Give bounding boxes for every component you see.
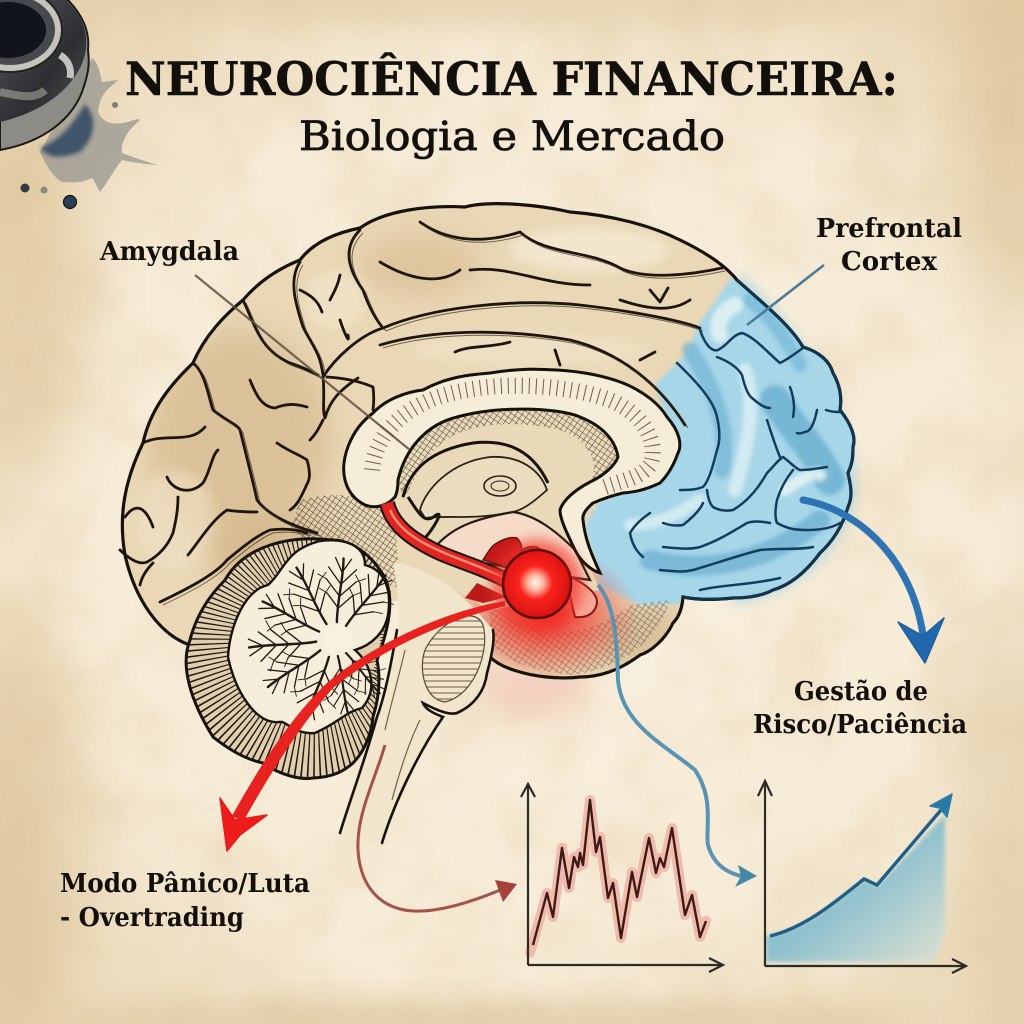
crosshatched rim of inner area: [398, 409, 618, 500]
ink splatter: [40, 58, 157, 192]
corpus callosum: [344, 369, 680, 573]
label: Amygdala: Amygdala: [99, 237, 239, 267]
cerebrum outline: [122, 204, 854, 678]
crosshatch between cortex and cerebellum: [290, 495, 400, 590]
s-curl: [408, 497, 439, 538]
arrow: thin blue to growth chart: [598, 585, 757, 887]
title line 2: Biologia e Mercado: [299, 114, 725, 160]
brainstem: [340, 563, 494, 843]
arrow: red panic arrow: [220, 601, 505, 851]
chart: steady growth: [758, 781, 966, 973]
lower frontal crosshatch: [490, 600, 670, 675]
blue watercolor patches: [630, 300, 830, 566]
pale band beneath thalamus: [437, 512, 590, 580]
amygdala: [491, 539, 583, 631]
label: Prefrontal Cortex: Cortex: [841, 247, 937, 277]
red limbic glow: [460, 562, 634, 676]
label: Prefrontal Cortex: Prefrontal: [816, 214, 962, 244]
icon: ink bottle and splatter: [0, 0, 157, 208]
blue cortex folds: [630, 330, 842, 590]
prefrontal blue region: [585, 270, 870, 605]
growth arrow head: [930, 794, 952, 817]
growth chart axes: [758, 781, 966, 973]
label: Modo Pânico/Luta - Overtrading: [60, 869, 310, 933]
inner limbic area: [395, 409, 618, 610]
growth line: [770, 810, 941, 936]
chart: volatile market: [521, 784, 723, 972]
tan and highlight shading: [150, 330, 330, 550]
cerebellum radial folds: [210, 535, 420, 745]
title line 1: NEUROCIÊNCIA FINANCEIRA:: [125, 51, 898, 106]
red neural pathway: [387, 503, 515, 585]
pink glow under brain: [480, 640, 590, 720]
arrow: blue risk arrow: [803, 500, 944, 663]
bottle body: [0, 0, 89, 150]
title: [125, 51, 898, 160]
leader line: Amygdala: [195, 275, 410, 450]
inner arc: [403, 442, 548, 497]
label: Gestão de Risco/Paciência: Risco/Paciência: [753, 710, 967, 740]
fine parallel sulcus strokes: [163, 225, 725, 605]
volatile line halo: [530, 800, 706, 953]
pons oval with hatch: [422, 616, 485, 702]
prefrontal halo: [733, 280, 850, 598]
label: Prefrontal Cortex: [816, 214, 962, 277]
label: Gestão de Risco/Paciência: Gestão de: [794, 677, 928, 707]
red tissue above amygdala: [483, 538, 553, 570]
cortex gyri lines: [120, 222, 722, 602]
cerebellum: [184, 537, 394, 780]
cerebellum arbor: [228, 540, 389, 733]
label: Modo Pânico/Luta - Overtrading: Modo Pânico/Luta: [60, 869, 310, 899]
arbor branches: [247, 556, 404, 725]
label: Gestão de Risco/Paciência: [753, 677, 967, 740]
volatile chart axes: [521, 784, 723, 972]
red tissue left of amygdala: [465, 583, 507, 603]
bottle neck opening: [0, 0, 62, 72]
arrow: thin red to volatile chart: [358, 745, 517, 911]
leader line: Prefrontal Cortex: [747, 265, 824, 325]
thalamus lens: [420, 457, 547, 518]
label: Modo Pânico/Luta - Overtrading: - Overtrading: [60, 903, 244, 933]
cerebrum fill: [122, 204, 854, 678]
growth area: [766, 815, 945, 962]
brain illustration: [120, 204, 870, 843]
pink lobe right of amygdala: [565, 575, 597, 617]
blue-region outer contour: [683, 280, 854, 599]
volatile line: [533, 800, 706, 945]
central white matter: [322, 625, 352, 655]
